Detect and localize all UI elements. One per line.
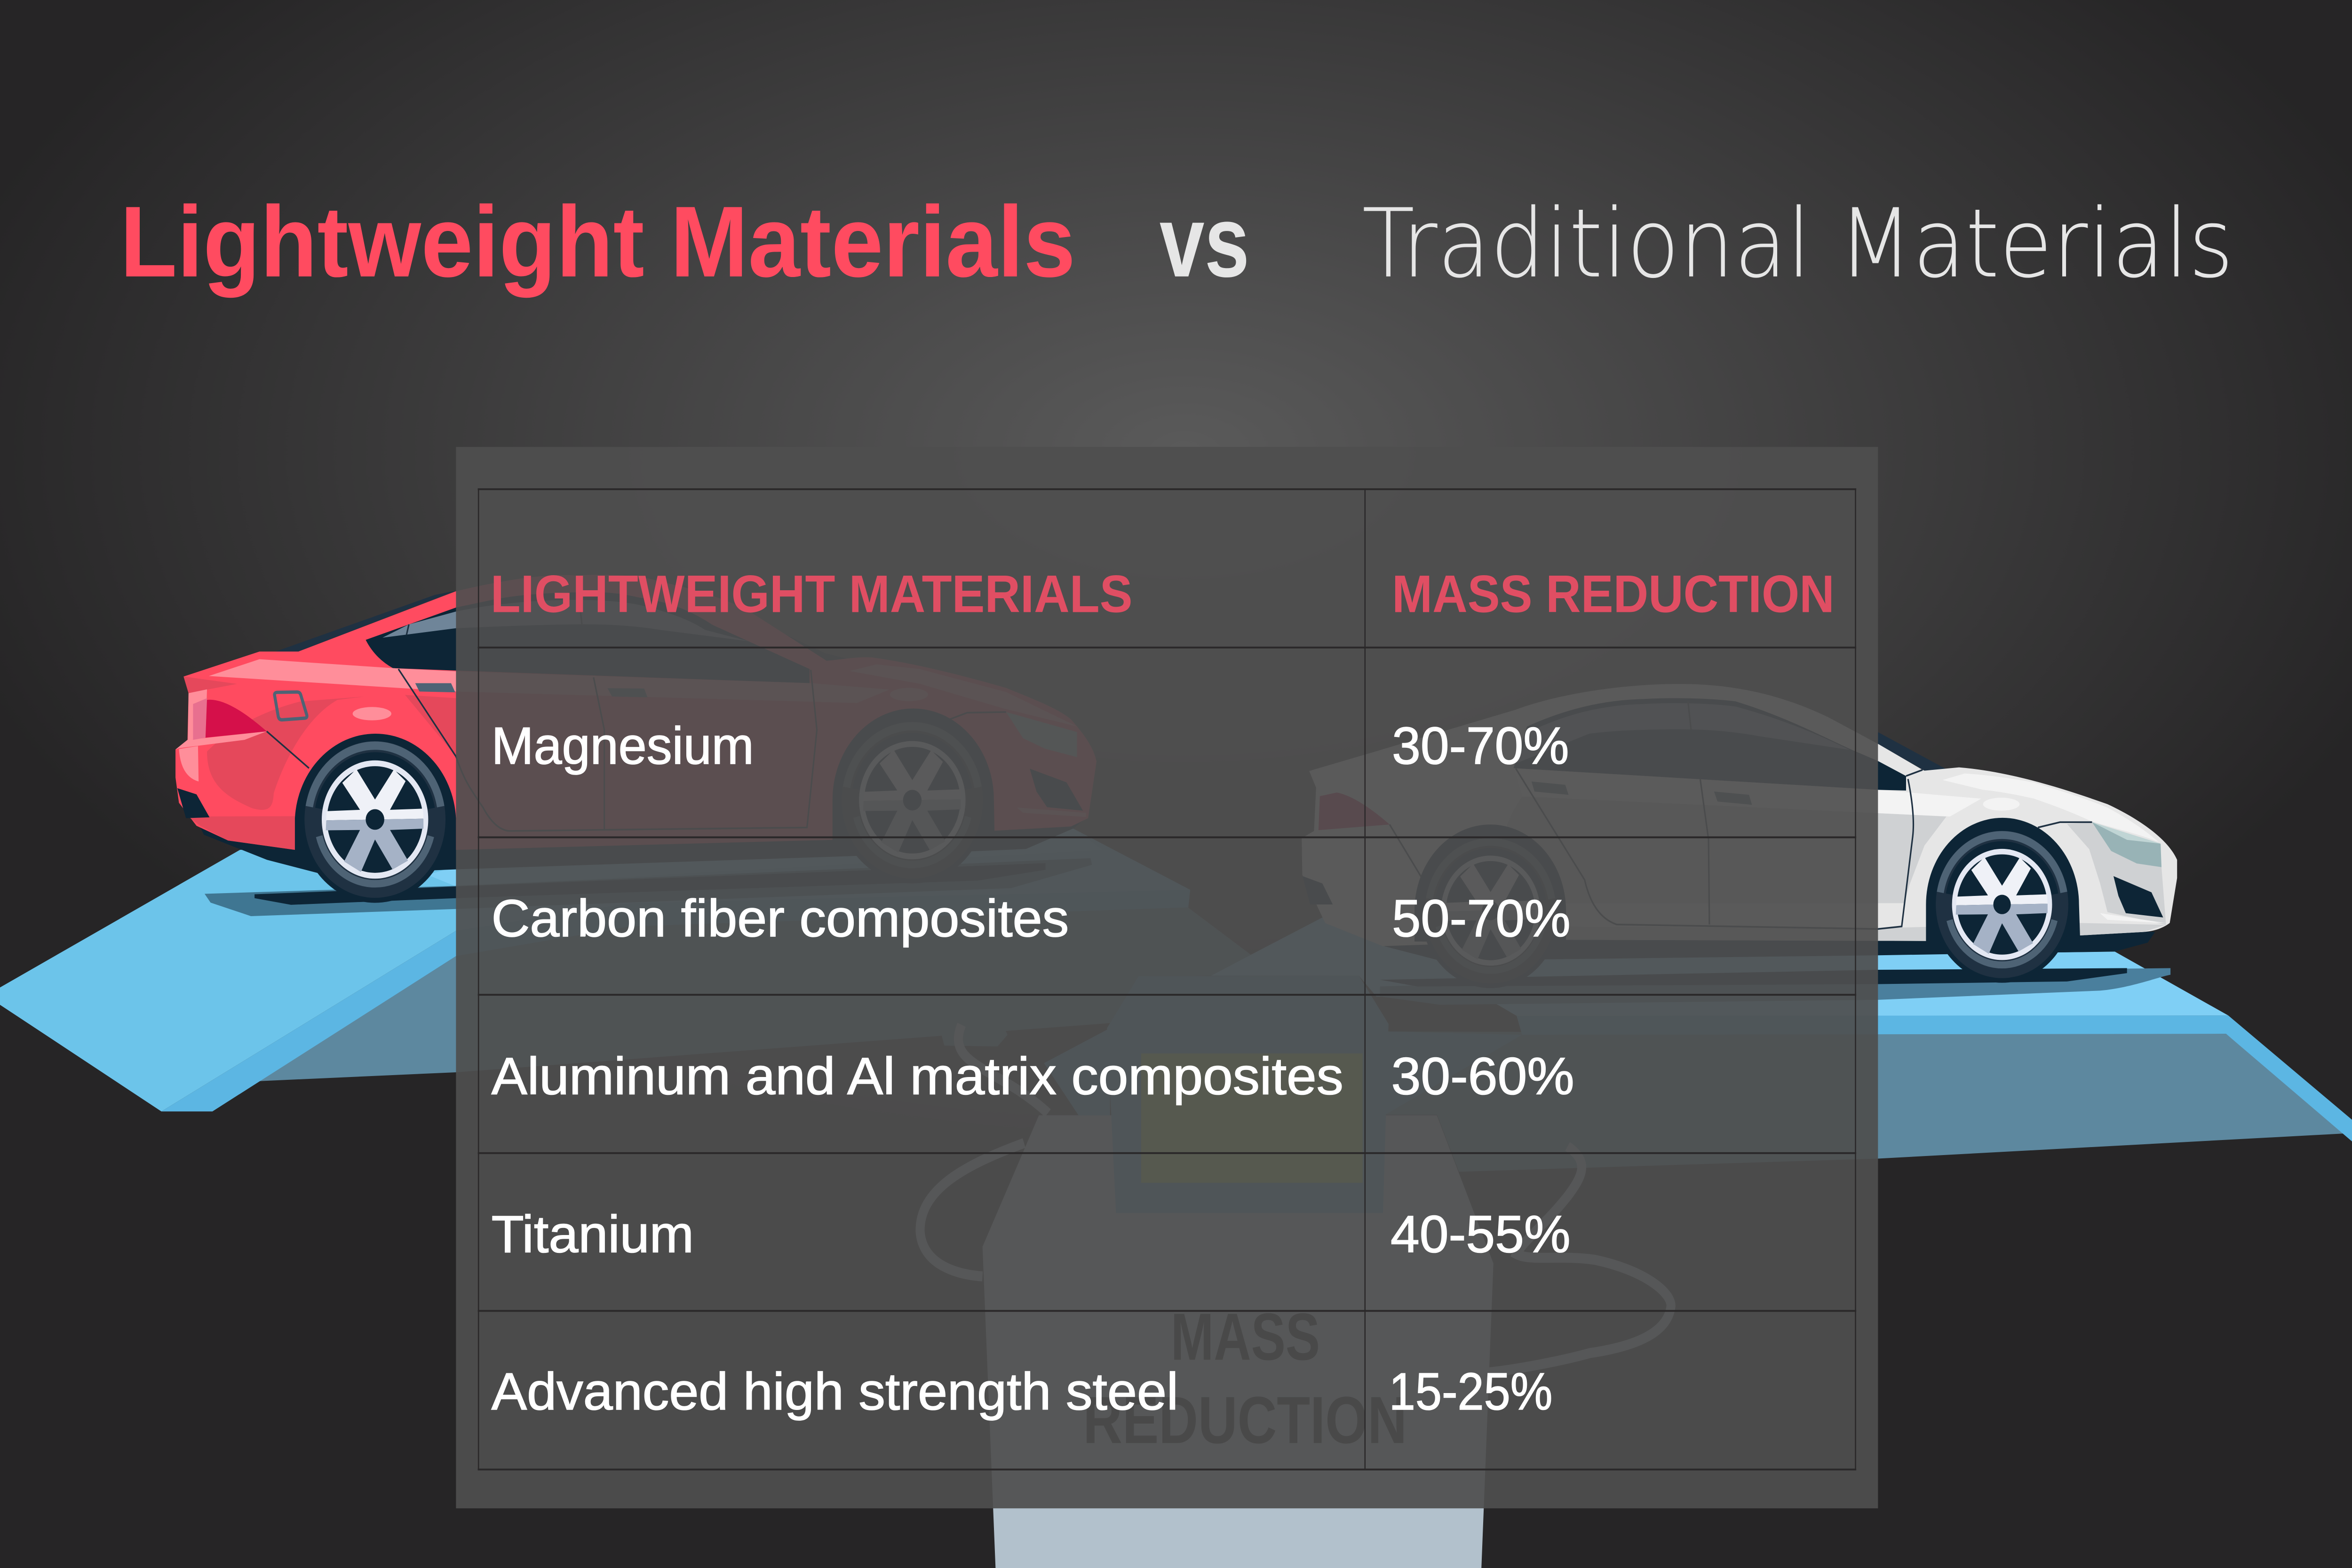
white car rear wheel [1421, 833, 1560, 988]
red car glass [366, 592, 810, 683]
row: titanium: Titanium [492, 1205, 694, 1264]
title [120, 184, 2233, 299]
table header [491, 565, 1835, 624]
device battery box [1107, 976, 1389, 1213]
title: vs: vs [1160, 184, 1249, 298]
red car windshield and roof shadow [276, 575, 852, 663]
white car body [1302, 684, 2177, 946]
title: traditional: Traditional Materials [1362, 189, 2233, 299]
white car roof shadow [1878, 732, 1947, 771]
red car wheel arches [295, 709, 994, 853]
red car ground shadow [205, 858, 1092, 916]
red car side shading [183, 676, 456, 850]
red car tail light and trim [175, 669, 817, 831]
row: carbon fiber [492, 889, 1571, 948]
table grid [478, 489, 1856, 1470]
row: magnesium: Magnesium [492, 717, 754, 775]
row: magnesium: 30-70% [1392, 717, 1569, 775]
red car front details [850, 665, 1086, 817]
blue wedges beside device [1044, 1028, 1522, 1115]
white car wheel arches [1414, 818, 2080, 943]
translucent table panel [456, 447, 1878, 1508]
left blue platform [0, 828, 1251, 1111]
battery green panel [1141, 1053, 1363, 1183]
row: magnesium [492, 717, 1569, 775]
device pillar [983, 1115, 1494, 1568]
row: titanium: 40-55% [1391, 1205, 1571, 1264]
left cable and plug [920, 993, 1048, 1276]
table header: LIGHTWEIGHT MATERIALS [491, 565, 1133, 624]
red car underbody [199, 800, 1088, 875]
red car highlight stripe [209, 659, 890, 703]
device label: REDUCTION [1083, 1383, 1407, 1457]
white car highlight stripe [1513, 768, 1981, 816]
red car body [175, 575, 1097, 850]
white car side shading [1500, 797, 2166, 941]
title: lightweight: Lightweight Materials [120, 185, 1075, 298]
white car [1302, 684, 2177, 1005]
row: steel: 15-25% [1389, 1362, 1552, 1421]
red car rear wheel [300, 736, 450, 903]
row: carbon fiber: Carbon fiber composites [492, 889, 1069, 948]
red car [175, 575, 1097, 916]
white car rear details [1303, 768, 1914, 929]
row: steel [492, 1362, 1552, 1421]
right blue platform [1211, 917, 2352, 1172]
white car front details [1906, 770, 2166, 923]
right cable and plug [1487, 1114, 1671, 1372]
row: titanium [492, 1205, 1571, 1264]
white car front wheel [1931, 826, 2073, 983]
row: steel: Advanced high strength steel [492, 1362, 1178, 1421]
device label [1083, 1299, 1407, 1457]
white car underbody [1323, 900, 2155, 961]
white car glass [1513, 698, 1906, 791]
row: aluminum: Aluminum and Al matrix composites [492, 1047, 1343, 1106]
row: aluminum: 30-60% [1391, 1047, 1574, 1106]
white car ground shadow [1380, 968, 2170, 1005]
row: aluminum [492, 1047, 1574, 1106]
device label: MASS [1171, 1299, 1320, 1374]
central charging device [920, 976, 1671, 1568]
red car front wheel [837, 717, 987, 884]
row: carbon fiber: 50-70% [1392, 889, 1571, 948]
table header: MASS REDUCTION [1392, 565, 1835, 624]
